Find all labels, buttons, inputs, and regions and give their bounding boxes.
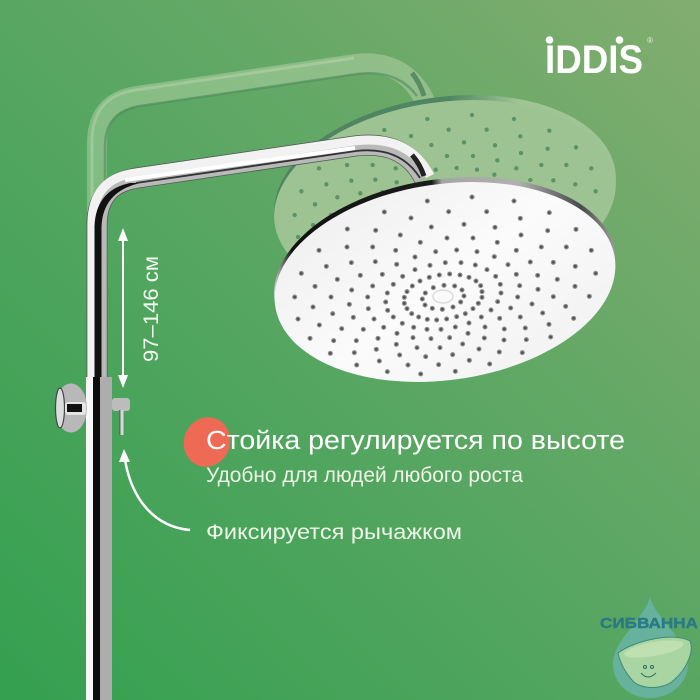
iddis logo: ® bbox=[647, 36, 653, 45]
ghost head bbox=[261, 74, 629, 321]
center ring bbox=[433, 290, 453, 303]
face bbox=[641, 666, 656, 677]
ghost arm bbox=[92, 58, 426, 218]
height sleeve bbox=[86, 377, 112, 700]
subheading: Удобно для людей любого роста bbox=[206, 464, 523, 487]
heading: Стойка регулируется по высоте bbox=[206, 427, 625, 455]
shower column with arm bbox=[92, 140, 430, 700]
head rim bbox=[261, 156, 629, 398]
height label: 97–146 см bbox=[140, 256, 163, 362]
curved arrow bbox=[119, 449, 190, 530]
sibvanna logo bbox=[600, 597, 698, 698]
iddis logo: IDDIS bbox=[545, 38, 643, 82]
bathtub inner bbox=[623, 637, 685, 661]
drop bbox=[613, 597, 688, 698]
lever caption: Фиксируется рычажком bbox=[206, 521, 462, 544]
bathtub bbox=[618, 637, 691, 688]
nozzles bbox=[295, 197, 596, 374]
lever bbox=[112, 398, 130, 435]
height arrow bbox=[118, 228, 128, 388]
ghost of raised shower position bbox=[92, 58, 629, 321]
shower head bbox=[261, 156, 629, 403]
head face bbox=[262, 161, 628, 403]
red accent blob bbox=[177, 411, 237, 473]
wall bracket bbox=[55, 384, 87, 432]
brand name: СИБВАННА bbox=[600, 615, 698, 632]
